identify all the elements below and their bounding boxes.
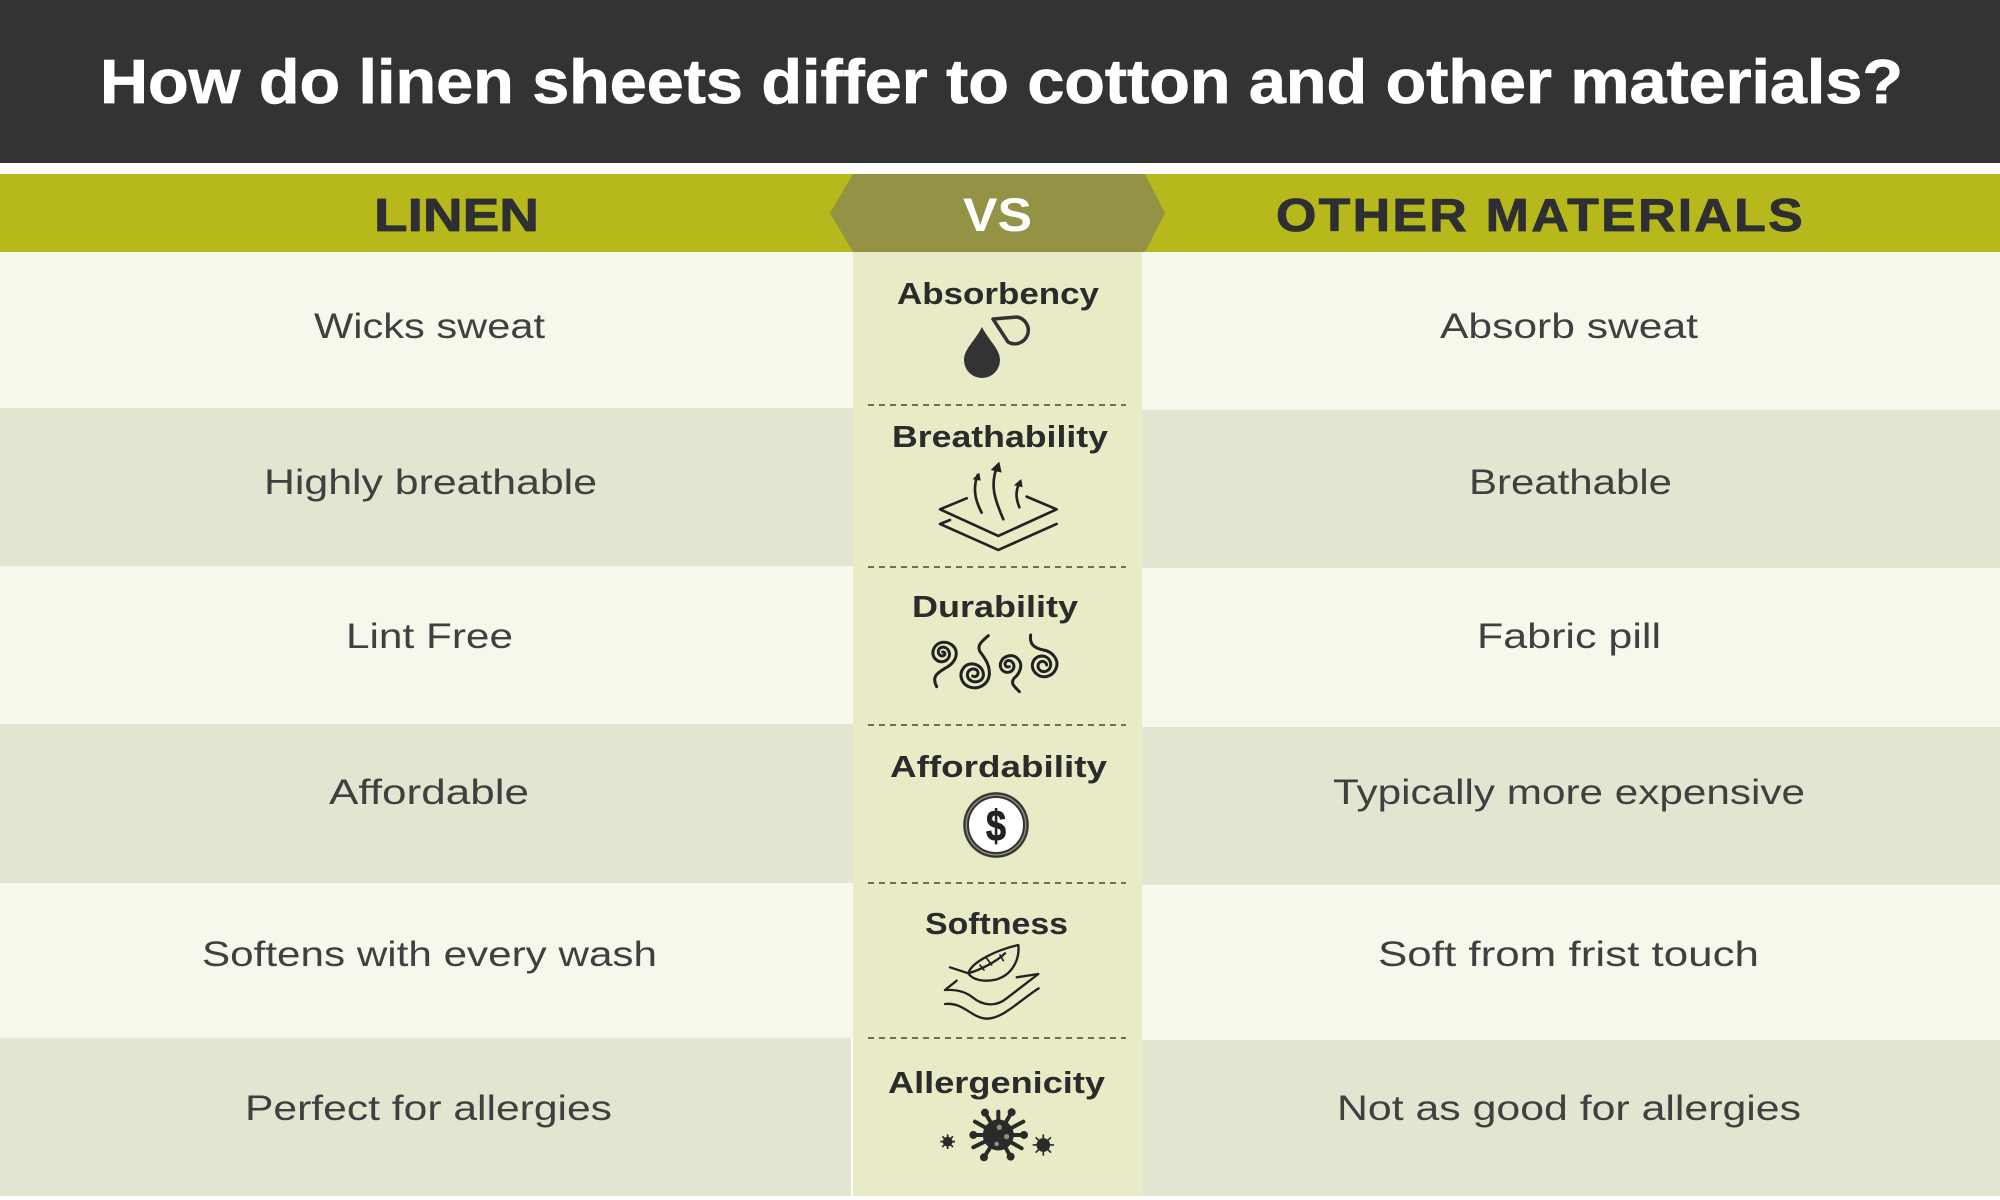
heading: linen: LINEN <box>374 189 539 241</box>
label: affordability: Affordability <box>890 749 1108 784</box>
panel: centre categories column <box>853 252 1142 1196</box>
label: softness: Softness <box>925 906 1068 941</box>
icon: dollar coin: $ <box>986 802 1006 851</box>
vs badge: VS <box>963 188 1032 241</box>
panel: other materials column: Fabric pill <box>1477 617 1661 656</box>
panel: linen column: Affordable <box>329 773 529 812</box>
panel: linen column <box>0 252 853 1196</box>
panel: linen column: Softens with every wash <box>202 935 657 974</box>
panel: other materials column: Not as good for allergies <box>1337 1089 1801 1128</box>
title banner <box>0 0 2000 163</box>
title banner: How do linen sheets differ to cotton and other materials? <box>100 48 1903 117</box>
label: breathability: Breathability <box>892 419 1109 454</box>
icon: allergens <box>940 1108 1054 1161</box>
icon: feather on fabric <box>945 945 1039 1019</box>
panel: linen column: Perfect for allergies <box>245 1089 612 1128</box>
header bar <box>0 174 2000 252</box>
icon: fabric layers with rising arrows <box>940 462 1057 550</box>
icon: dollar coin <box>963 792 1029 858</box>
vs badge <box>830 174 1165 252</box>
panel: other materials column: Absorb sweat <box>1440 307 1698 346</box>
heading: other materials: OTHER MATERIALS <box>1276 189 1805 241</box>
icon: water drops <box>964 317 1028 378</box>
label: absorbency: Absorbency <box>897 276 1100 311</box>
panel: other materials column: Breathable <box>1469 463 1672 502</box>
panel: other materials column: Soft from frist touch <box>1378 935 1759 974</box>
label: allergenicity: Allergenicity <box>888 1065 1106 1100</box>
panel: other materials column <box>1140 252 2000 1196</box>
icon: fabric pills <box>933 635 1057 692</box>
panel: linen column: Lint Free <box>346 617 513 656</box>
panel: linen column: Highly breathable <box>264 463 597 502</box>
panel: linen column: Wicks sweat <box>314 307 545 346</box>
label: durability: Durability <box>912 589 1079 624</box>
panel: other materials column: Typically more expensive <box>1333 773 1805 812</box>
